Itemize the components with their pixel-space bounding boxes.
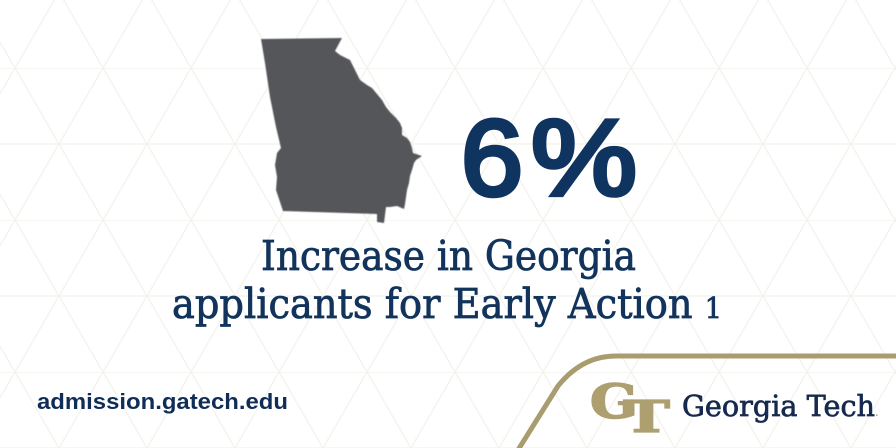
percent sign: % — [531, 97, 637, 218]
logo mark: GT monogram — [590, 375, 670, 443]
heading line 2: applicants for Early Action 1 — [172, 280, 722, 328]
digit 6: 6 — [461, 97, 523, 218]
website link: admission.gatech.edu — [37, 389, 288, 414]
big number: 6% — [461, 97, 637, 218]
heading: increase in Georgia applicants — [172, 232, 722, 328]
gold curved corner line — [518, 356, 896, 448]
logo wordmark: Georgia Tech — [682, 389, 875, 423]
logo wordmark period: . — [875, 405, 878, 420]
logo mark: GT monogram: G — [590, 375, 638, 430]
logo: Georgia Tech — [590, 375, 878, 443]
heading line 1: Increase in Georgia — [261, 232, 636, 280]
logo mark: GT monogram: T — [623, 392, 670, 443]
icon: Georgia state map — [261, 38, 422, 223]
